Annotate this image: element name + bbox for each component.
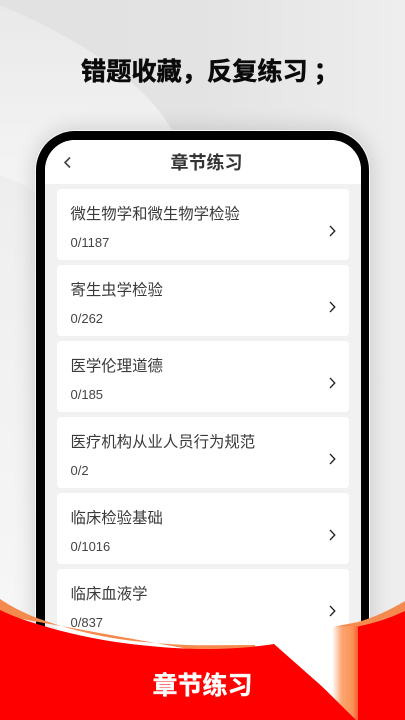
list item 2: 寄生虫学检验 xyxy=(70,282,163,298)
phone mockup xyxy=(35,130,370,720)
list item 1 xyxy=(56,188,348,260)
app header xyxy=(44,140,360,184)
orange rim left xyxy=(0,599,255,652)
white and orange fold xyxy=(270,626,360,720)
list item 5: 临床检验基础 xyxy=(70,510,163,526)
list item 2: 0/262 xyxy=(70,310,103,326)
list item 6: 临床血液学 xyxy=(70,586,147,602)
red area right xyxy=(358,611,405,720)
list item 4: 医疗机构从业人员行为规范 xyxy=(70,434,255,450)
orange rim right xyxy=(335,601,405,628)
red area left xyxy=(0,610,360,720)
list item 1: 0/1187 xyxy=(70,234,109,250)
list item 4: 0/2 xyxy=(70,462,89,478)
list item 4 xyxy=(56,416,348,488)
list item 5 xyxy=(56,492,348,564)
banner label: 章节练习 xyxy=(152,672,252,700)
list item 6 xyxy=(56,568,348,688)
title: 错题收藏，反复练习； xyxy=(81,58,339,86)
icon: back arrow xyxy=(64,156,70,168)
phone screen xyxy=(44,140,360,720)
list item 3: 0/185 xyxy=(70,386,103,402)
list item 5: 0/1016 xyxy=(70,538,110,554)
list item 2 xyxy=(56,264,348,336)
list item 3 xyxy=(56,340,348,412)
screen title: 章节练习 xyxy=(170,152,242,172)
list item 6: 0/837 xyxy=(70,614,103,630)
list item 3: 医学伦理道德 xyxy=(70,358,163,374)
list item 1: 微生物学和微生物学检验 xyxy=(70,206,240,222)
